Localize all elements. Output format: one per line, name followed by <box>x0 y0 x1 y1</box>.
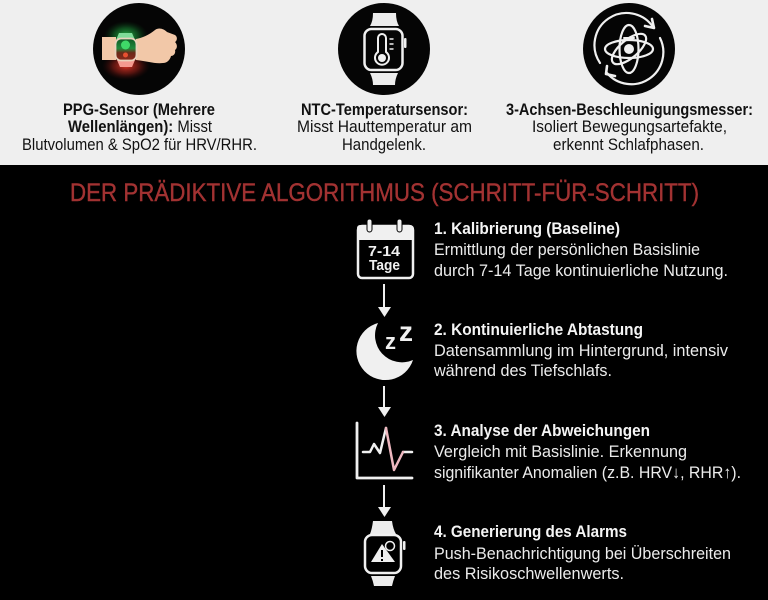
step 1 text: 1. Kalibrierung (Baseline) <box>434 219 620 238</box>
step 4 text: Push-Benachrichtigung bei Überschreiten <box>434 544 731 563</box>
icon: alarm watch <box>365 521 406 586</box>
text: PPG sensor: Wellenlängen): Misst <box>68 117 212 136</box>
icon: calendar 7-14 days <box>357 219 414 278</box>
arrow: step 3 to 4 <box>378 485 391 517</box>
step 2 text: 2. Kontinuierliche Abtastung <box>434 320 643 339</box>
step 2 text <box>433 320 728 380</box>
step 1 text: durch 7-14 Tage kontinuierliche Nutzung. <box>434 261 728 280</box>
step 2 text: Datensammlung im Hintergrund, intensiv <box>434 341 728 360</box>
text: NTC temperature sensor <box>297 100 472 154</box>
icon: moon and zzz: z <box>385 329 396 354</box>
icon: anomaly chart <box>357 423 412 478</box>
text: PPG sensor: Blutvolumen & SpO2 für HRV/RHR. <box>22 135 257 154</box>
icon: PPG sensor on wrist <box>93 3 185 95</box>
icon: moon and zzz <box>356 316 413 380</box>
step 3 text: signifikanter Anomalien (z.B. HRV↓, RHR↑). <box>434 463 741 482</box>
step 1 text: Ermittlung der persönlichen Basislinie <box>434 240 700 259</box>
step 3 text: Vergleich mit Basislinie. Erkennung <box>434 442 687 461</box>
text: PPG sensor <box>22 100 257 154</box>
title: DER PRÄDIKTIVE ALGORITHMUS (SCHRITT-FÜR-SCHRITT) <box>70 179 699 207</box>
text: PPG sensor: PPG-Sensor (Mehrere <box>63 100 215 119</box>
step 4 text: des Risikoschwellenwerts. <box>434 564 624 583</box>
panel: sensors <box>0 0 768 165</box>
icon: temperature watch <box>338 3 430 95</box>
icon: three-axis accelerometer <box>583 3 675 95</box>
text: 3-axis accelerometer: Isoliert Bewegungsartefakte, <box>532 117 727 136</box>
icon: calendar 7-14 days: 7-14 <box>368 243 401 260</box>
text: 3-axis accelerometer <box>506 100 753 154</box>
icon: moon and zzz: z <box>399 316 413 347</box>
text: NTC temperature sensor: NTC-Temperatursensor: <box>301 100 468 119</box>
text: 3-axis accelerometer: erkennt Schlafphasen. <box>553 135 704 154</box>
arrow: step 2 to 3 <box>378 386 391 417</box>
step 3 text <box>434 421 741 482</box>
step 2 text: während des Tiefschlafs. <box>433 361 612 380</box>
step 1 text <box>434 219 728 280</box>
step 3 text: 3. Analyse der Abweichungen <box>434 421 650 440</box>
text: NTC temperature sensor: Misst Hauttemperatur am <box>297 117 472 136</box>
text: NTC temperature sensor: Handgelenk. <box>342 135 426 154</box>
icon: calendar 7-14 days: Tage <box>369 257 400 274</box>
arrow: step 1 to 2 <box>378 284 391 317</box>
step 4 text <box>434 522 731 583</box>
step 4 text: 4. Generierung des Alarms <box>434 522 627 541</box>
